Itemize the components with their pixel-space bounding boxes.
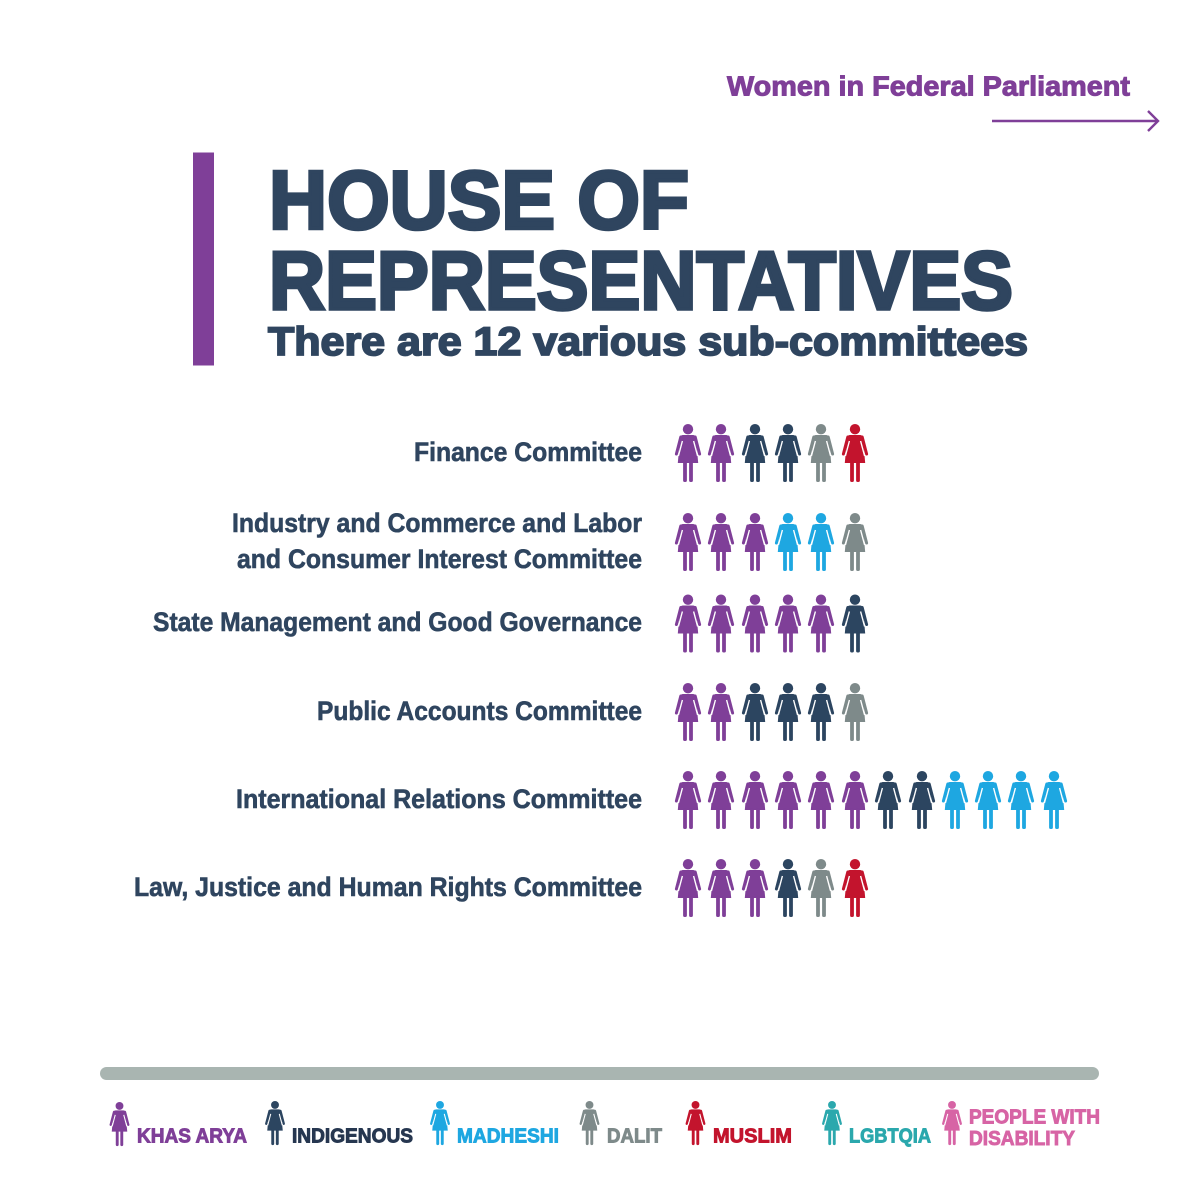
- arrow: [992, 111, 1158, 131]
- legend: Madheshi: [431, 1101, 559, 1148]
- label: Public Accounts Committee: [317, 696, 642, 726]
- label: [232, 508, 642, 574]
- label: Industry and Commerce and Labor: [232, 508, 642, 538]
- legend: Khas Arya: KHAS ARYA: [137, 1126, 247, 1148]
- pictogram: [676, 683, 867, 741]
- legend: Indigenous: INDIGENOUS: [292, 1126, 413, 1148]
- legend: Indigenous: [266, 1101, 413, 1148]
- legend divider bar: [100, 1067, 1099, 1080]
- label: and Consumer Interest Committee: [237, 544, 642, 574]
- accent bar: [193, 152, 214, 366]
- row: Law, Justice: [134, 859, 867, 917]
- subtitle: There are 12 various sub-committees: [268, 320, 1028, 364]
- row: Industry and Commerce: [232, 508, 867, 574]
- pictogram: [676, 594, 867, 652]
- legend: LGBTQIA: LGBTQIA: [849, 1126, 931, 1148]
- row: International Relations: [236, 771, 1066, 829]
- legend: LGBTQIA: [823, 1101, 931, 1148]
- label: International Relations Committee: [236, 784, 642, 814]
- title: [269, 154, 1013, 327]
- title: REPRESENTATIVES: [269, 234, 1013, 327]
- legend: People with Disability: [943, 1101, 1100, 1150]
- pictogram: [676, 424, 867, 482]
- legend: Madheshi: MADHESHI: [457, 1126, 559, 1148]
- legend: Dalit: [581, 1101, 662, 1148]
- legend: [111, 1101, 1100, 1150]
- pictogram: [676, 859, 867, 917]
- legend: Muslim: MUSLIM: [713, 1126, 792, 1148]
- legend: People with Disability: PEOPLE WITH: [969, 1106, 1100, 1128]
- pictogram: [676, 771, 1066, 829]
- legend: Khas Arya: [111, 1102, 247, 1148]
- label: Finance Committee: [414, 437, 642, 467]
- pictogram: [676, 513, 867, 571]
- legend: Muslim: [687, 1101, 792, 1148]
- row: Public Accounts: [317, 683, 867, 741]
- legend: Dalit: DALIT: [607, 1126, 662, 1148]
- title: HOUSE OF: [269, 154, 689, 246]
- section link: Women in Federal Parliament: Women in Federal Parliament: [727, 70, 1130, 102]
- label: Law, Justice and Human Rights Committee: [134, 872, 642, 902]
- row: Finance Committee: [414, 424, 867, 482]
- legend: People with Disability: DISABILITY: [969, 1128, 1076, 1150]
- row: State Management: [153, 594, 867, 652]
- label: State Management and Good Governance: [153, 607, 642, 637]
